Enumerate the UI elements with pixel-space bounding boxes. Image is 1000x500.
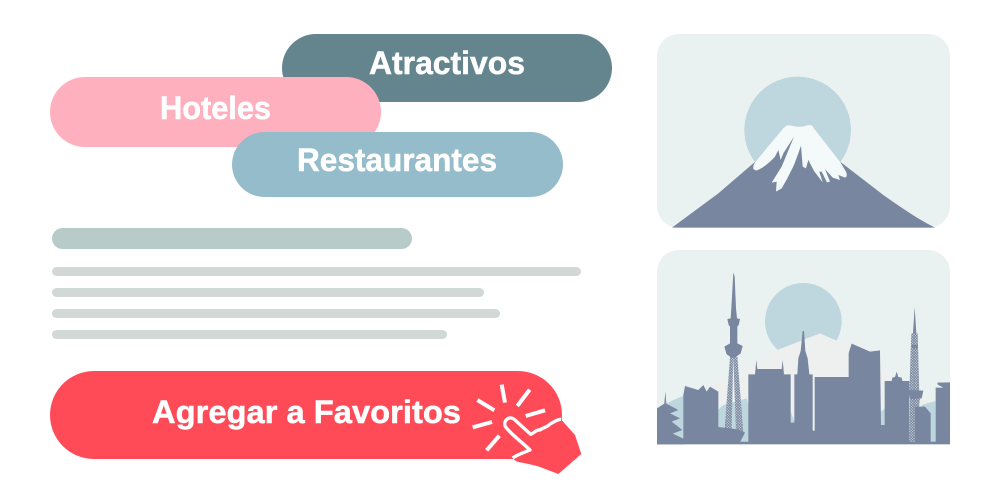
pill: Atractivos [282,34,612,102]
central block [748,331,909,442]
left block [683,385,745,442]
right block with dish [936,382,950,442]
skyline silhouette [657,272,950,444]
distant Fuji [708,333,937,442]
image card: Mount Fuji [657,34,950,228]
image card: Tokyo skyline [657,250,950,444]
tower lattices [725,333,920,442]
pill: Hoteles: Hoteles [160,90,271,126]
right low building [915,407,931,442]
pill: Hoteles [50,77,381,147]
text placeholder lines [52,267,581,339]
button: Agregar a Favoritos: Agregar a Favoritos [152,394,461,430]
sky tree [724,272,743,357]
ground strip [657,442,950,444]
right tower [908,307,923,399]
pill: Atractivos: Atractivos [369,45,525,81]
pill: Restaurantes [232,132,563,197]
heading placeholder bar [52,228,412,249]
button: Agregar a Favoritos [50,371,562,459]
hills [657,395,936,444]
card background [657,250,950,444]
card background [657,34,950,228]
icon: clicking hand [473,385,581,474]
snow cap [753,125,847,192]
pill: Restaurantes: Restaurantes [297,142,497,178]
mountain [672,127,935,228]
pagoda [657,391,684,444]
sun [744,77,851,183]
sun [765,283,842,360]
